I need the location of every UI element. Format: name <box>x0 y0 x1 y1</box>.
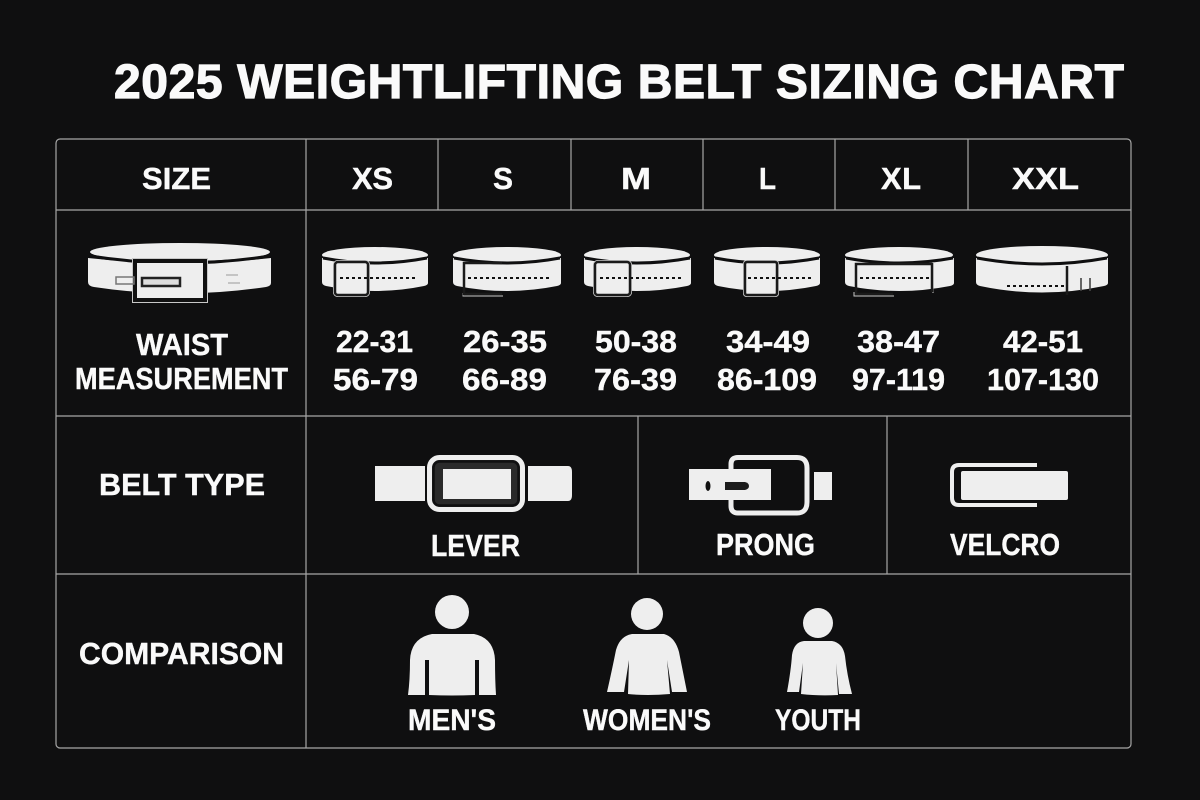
size XL: XL <box>881 161 921 196</box>
XS range: 56-79 <box>333 362 418 397</box>
icon: men's figure <box>408 595 496 696</box>
size XS: XS <box>352 161 393 196</box>
XS range <box>333 324 418 397</box>
L range: 34-49 <box>726 324 810 359</box>
icon: prong belt <box>689 458 832 513</box>
M range: 76-39 <box>594 362 677 397</box>
icon: velcro belt <box>952 465 1068 505</box>
inch and cm ranges <box>333 324 1099 397</box>
label: lever: LEVER <box>431 528 520 563</box>
label: size: SIZE <box>142 161 211 196</box>
label: waist measurement <box>75 327 288 396</box>
XL range: 97-119 <box>852 362 945 397</box>
belt XS <box>322 247 428 296</box>
M range: 50-38 <box>595 324 677 359</box>
size S: S <box>493 161 513 196</box>
XXL range <box>987 324 1099 397</box>
S range: 66-89 <box>462 362 547 397</box>
belt L <box>714 247 820 296</box>
label: women's: WOMEN'S <box>583 704 711 737</box>
icon: women's figure <box>607 598 687 695</box>
L range <box>717 324 817 397</box>
size M: M <box>621 161 651 196</box>
XS range: 22-31 <box>336 324 413 359</box>
XL range <box>852 324 945 397</box>
comparison row <box>79 595 861 737</box>
icon: youth figure <box>787 608 852 695</box>
XXL range: 107-130 <box>987 362 1099 397</box>
label: comparison: COMPARISON <box>79 636 284 671</box>
XL range: 38-47 <box>857 324 940 359</box>
belt type row <box>99 458 1068 563</box>
icon: large lever belt <box>88 243 271 302</box>
XXL range: 42-51 <box>1003 324 1083 359</box>
label: prong: PRONG <box>716 527 815 562</box>
L range: 86-109 <box>717 362 817 397</box>
belt XXL <box>976 246 1108 295</box>
label: waist measurement: MEASUREMENT <box>75 361 288 396</box>
waist measurement row <box>75 243 1108 397</box>
size XXL: XXL <box>1012 161 1079 196</box>
header row: sizes <box>142 161 1079 196</box>
icon: lever belt <box>375 458 572 510</box>
label: velcro: VELCRO <box>950 527 1060 562</box>
S range: 26-35 <box>463 324 547 359</box>
table grid <box>56 139 1131 748</box>
title: 2025 WEIGHTLIFTING BELT SIZING CHART <box>114 56 1124 109</box>
M range <box>594 324 677 397</box>
S range <box>462 324 547 397</box>
size L: L <box>759 161 776 196</box>
label: belt type: BELT TYPE <box>99 467 265 502</box>
belt XL <box>845 247 954 296</box>
label: waist measurement: WAIST <box>136 327 228 362</box>
label: men's: MEN'S <box>408 704 496 737</box>
belt M <box>584 247 691 296</box>
label: youth: YOUTH <box>775 704 861 737</box>
belt S <box>453 247 561 296</box>
